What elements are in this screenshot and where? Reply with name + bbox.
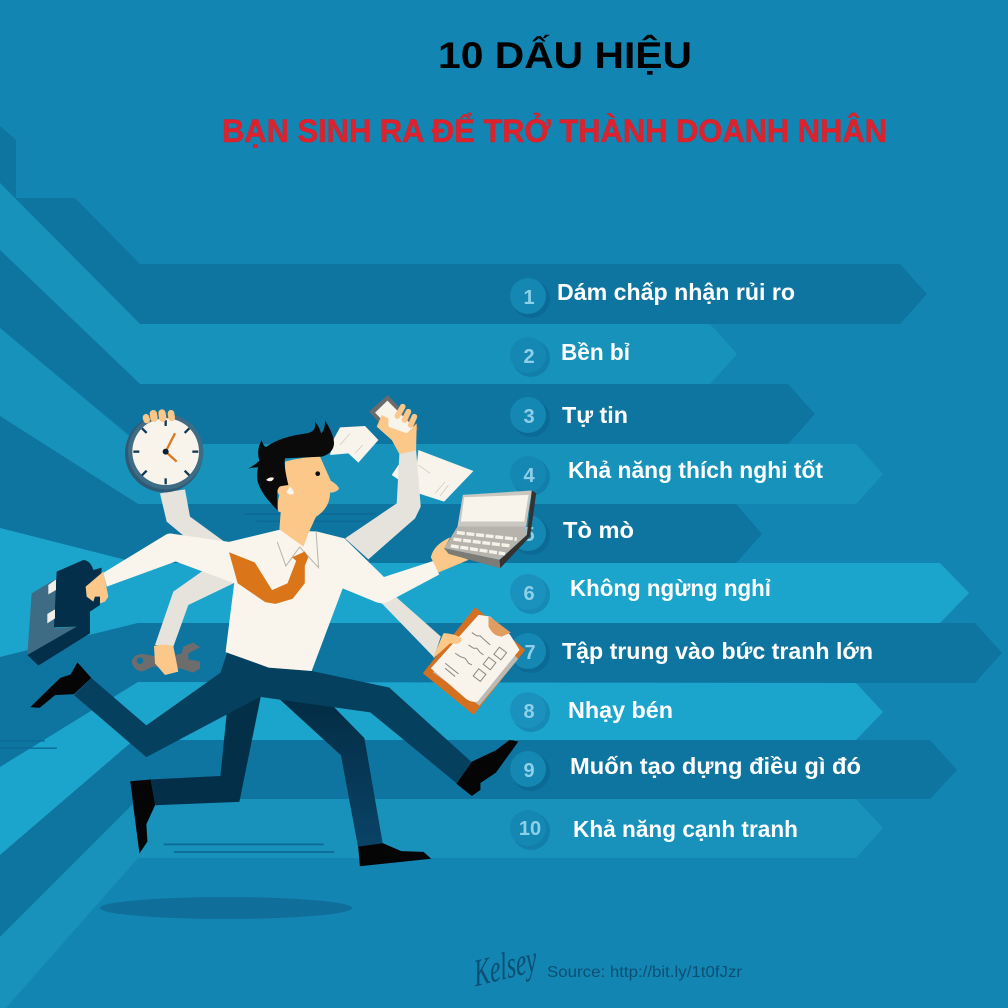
- row 6: Không ngừng nghỉ: Không ngừng nghỉ: [570, 575, 771, 601]
- laptop: [431, 491, 536, 573]
- ground shadow: [100, 897, 352, 919]
- row 5: Tò mò: 5: [523, 524, 535, 546]
- row 9: Muốn tạo dựng điều gì đó: [0, 740, 957, 937]
- clock: [125, 409, 203, 492]
- row 1: Dám chấp nhận rủi ro: [0, 126, 927, 324]
- row 10: Khả năng cạnh tranh: 10: [519, 818, 541, 840]
- title: 10 DẤU HIỆU: [438, 34, 692, 76]
- row 5: Tò mò: [0, 416, 762, 563]
- row 3: Tự tin: 3: [523, 406, 535, 428]
- row 10: Khả năng cạnh tranh: [0, 799, 883, 1008]
- row 7: Tập trung vào bức tranh lớn: Tập trung vào bức tranh lớn: [562, 638, 873, 664]
- row 4: Khả năng thích nghi tốt: 4: [523, 465, 535, 487]
- torso and front arms: [103, 530, 439, 671]
- flying papers: [330, 426, 473, 502]
- back arms: [155, 450, 441, 657]
- row 7: Tập trung vào bức tranh lớn: 7: [524, 642, 536, 664]
- row 1: Dám chấp nhận rủi ro: Dám chấp nhận rủi ro: [557, 279, 795, 305]
- row 8: Nhạy bén: 8: [523, 701, 535, 723]
- phone: [370, 396, 418, 454]
- row 6: Không ngừng nghỉ: [0, 528, 969, 657]
- subtitle: BẠN SINH RA ĐỂ TRỞ THÀNH DOANH NHÂN: [222, 113, 887, 149]
- tie: [229, 552, 308, 604]
- row 2: Bền bỉ: 2: [523, 346, 535, 368]
- row 3: Tự tin: Tự tin: [562, 402, 628, 428]
- row 8: Nhạy bén: [0, 682, 883, 855]
- row 6: Không ngừng nghỉ: 6: [523, 583, 535, 605]
- wrench: [132, 643, 200, 675]
- source line: Source: http://bit.ly/1t0fJzr: [547, 964, 743, 981]
- businessman illustration: [0, 396, 536, 866]
- row 8: Nhạy bén: Nhạy bén: [568, 697, 673, 723]
- clipboard: [423, 607, 525, 715]
- row 4: Khả năng thích nghi tốt: [0, 328, 883, 504]
- row 3: Tự tin: [0, 250, 815, 444]
- motion lines: [0, 513, 375, 853]
- briefcase: [27, 560, 108, 666]
- row 2: Bền bỉ: Bền bỉ: [561, 339, 630, 365]
- rear legs: [150, 695, 383, 848]
- row 10: Khả năng cạnh tranh: Khả năng cạnh tranh: [573, 816, 798, 842]
- row 9: Muốn tạo dựng điều gì đó: 9: [523, 760, 535, 782]
- row 7: Tập trung vào bức tranh lớn: [0, 623, 1002, 767]
- signature: Kelsey: [471, 938, 539, 995]
- collar: [277, 532, 319, 568]
- front legs: [74, 652, 472, 783]
- neck and head: [248, 421, 339, 547]
- row 5: Tò mò: Tò mò: [563, 517, 634, 543]
- shoes: [30, 662, 518, 866]
- row 2: Bền bỉ: [0, 183, 737, 384]
- row 1: Dám chấp nhận rủi ro: 1: [523, 287, 535, 309]
- row 4: Khả năng thích nghi tốt: Khả năng thích nghi tốt: [568, 457, 823, 483]
- row 9: Muốn tạo dựng điều gì đó: Muốn tạo dựng điều gì đó: [570, 753, 861, 779]
